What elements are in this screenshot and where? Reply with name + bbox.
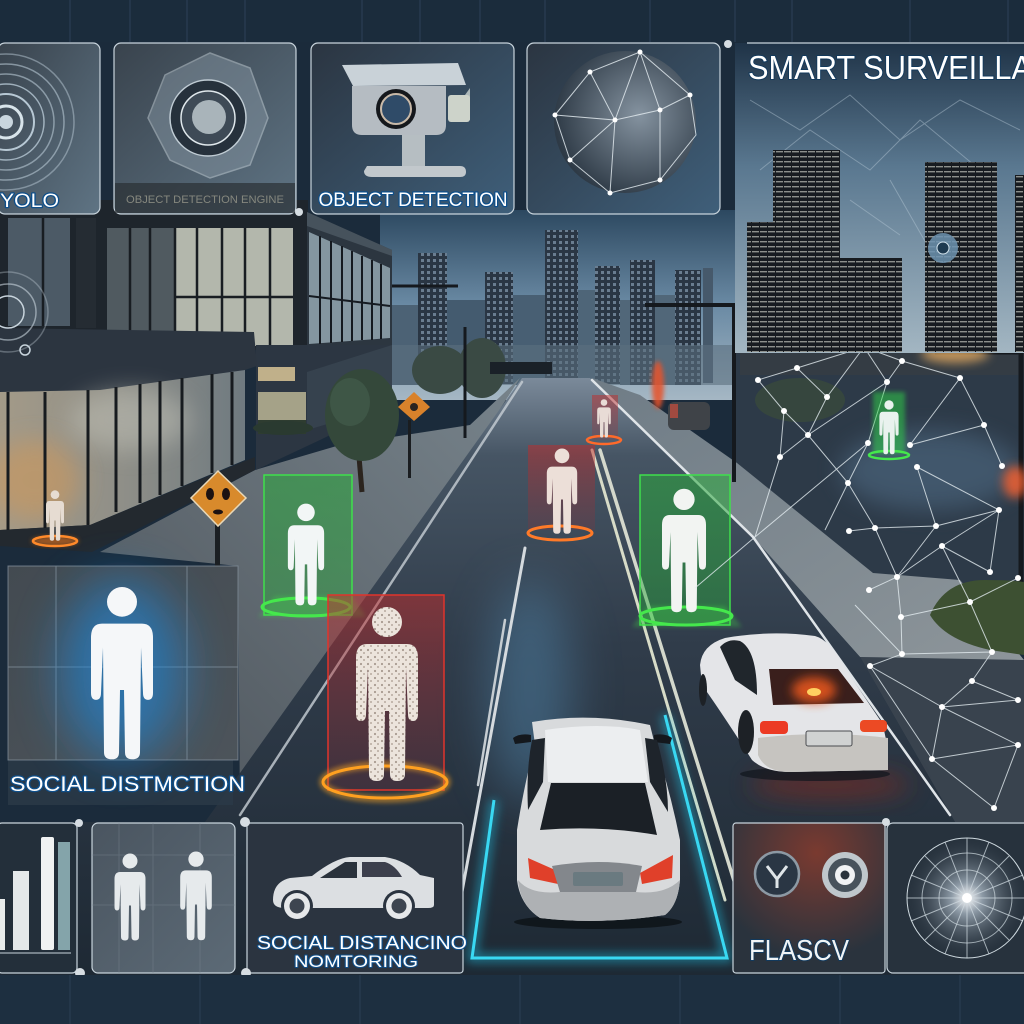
panel: flascv <box>733 823 885 973</box>
right sidewalk <box>592 378 1024 660</box>
panel: object detection <box>311 43 514 214</box>
detection: left person green <box>258 475 366 617</box>
lower right ground <box>860 657 1024 822</box>
panel: bar chart <box>0 823 77 973</box>
icon: burst <box>905 836 1024 960</box>
neural network overlay <box>695 344 1021 811</box>
icon: wireframe globe <box>552 50 696 196</box>
panel: lens <box>114 43 296 214</box>
detection: center person red <box>528 445 595 540</box>
icon: person right <box>180 852 212 940</box>
road markings <box>240 380 950 930</box>
icon: person left <box>114 854 146 940</box>
detection: near person red <box>323 595 447 799</box>
label bar <box>115 183 295 213</box>
left sidewalk <box>100 378 520 815</box>
distant gantry <box>490 362 552 374</box>
lamp glow <box>921 345 989 363</box>
icon: tower camera <box>928 233 958 263</box>
label: object detection: OBJECT DETECTION <box>318 190 508 211</box>
panel: two people <box>92 823 235 973</box>
icon: glowing person <box>60 580 184 760</box>
left wall emblem <box>0 272 48 355</box>
label: social distancing: SOCIAL DISTMCTION <box>10 773 245 796</box>
red glow under right car <box>750 771 910 799</box>
icon: yolo spiral <box>0 54 74 190</box>
parked distant car <box>668 402 710 430</box>
panel corner nodes <box>75 40 890 978</box>
label: social distancing monitoring: NOMTORING <box>294 952 418 971</box>
panel: social distancing large <box>8 566 245 805</box>
street light glow right <box>1003 466 1024 498</box>
road sign small <box>398 392 430 478</box>
icon: car <box>273 857 434 922</box>
faint sketch lines <box>750 95 1020 250</box>
panel: yolo <box>0 43 100 214</box>
left building <box>0 200 392 552</box>
icon: security camera <box>342 63 470 177</box>
small bushes <box>253 421 313 435</box>
distant red marker <box>652 361 664 409</box>
label: yolo: YOLO <box>0 191 59 212</box>
distant trees <box>412 338 506 398</box>
street tree <box>325 369 399 492</box>
road sign large <box>191 471 246 570</box>
car: center rear <box>513 718 682 929</box>
bottom band <box>0 975 1024 1024</box>
towers <box>747 150 1024 352</box>
sky <box>380 210 750 400</box>
icon: o circle <box>822 852 868 898</box>
cyan lane highlight <box>472 715 727 958</box>
label: lens caption: OBJECT DETECTION ENGINE <box>126 194 284 206</box>
icon: y circle <box>755 852 799 896</box>
bars <box>0 837 70 950</box>
icon: lens <box>148 53 268 178</box>
road blue reflection <box>488 580 572 800</box>
panel: burst <box>887 823 1024 973</box>
detection: far right person green <box>869 392 909 459</box>
street lamps <box>392 286 1021 600</box>
panel: globe <box>527 43 720 214</box>
panel: smart surveillance <box>735 43 1024 353</box>
panel: social distancing monitoring <box>247 823 467 973</box>
label: flascv: FLASCV <box>749 935 850 967</box>
label: social distancing monitoring: SOCIAL DISTANCINO <box>257 933 467 953</box>
right side street <box>735 340 1024 590</box>
detection: right person green <box>632 475 742 627</box>
road <box>0 378 1024 975</box>
city skyline <box>392 230 742 385</box>
top band <box>0 0 1024 42</box>
car: right <box>699 633 890 781</box>
pedestrian: storefront <box>31 490 79 546</box>
hedge <box>930 580 1024 655</box>
detection: distant person <box>587 395 621 444</box>
label: social distancing monitoring <box>257 933 467 971</box>
